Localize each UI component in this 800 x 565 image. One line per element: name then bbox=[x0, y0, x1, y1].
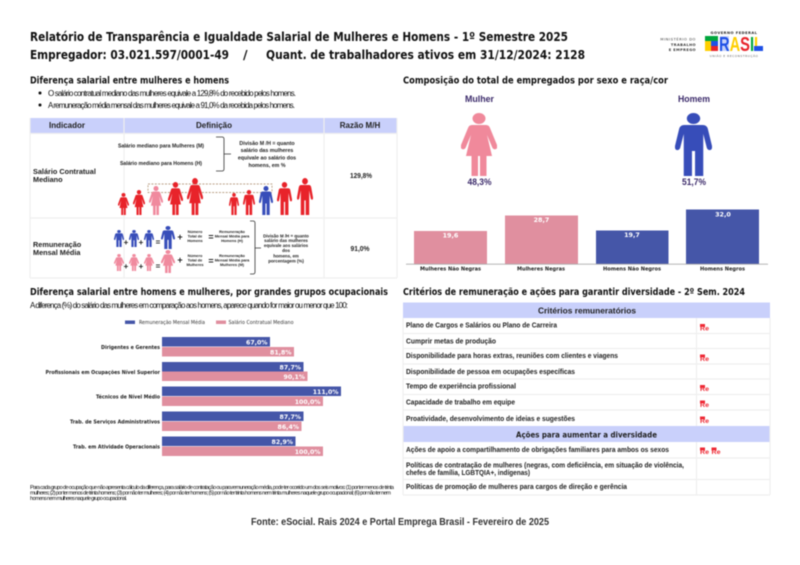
table: indicadores bbox=[30, 118, 397, 278]
section header: critérios remuneratórios: Critérios remuneratórios bbox=[538, 306, 636, 316]
formula labels: Mulheres bbox=[186, 262, 204, 267]
operators: = bbox=[208, 232, 214, 242]
bar chart: sexo e raça/cor bbox=[406, 210, 768, 272]
row: salário contratual mediano: homens, em % bbox=[248, 163, 286, 169]
bar chart: grupos ocupacionais: Profissionais em Ocupações Nível Superior bbox=[46, 369, 160, 376]
bar chart: grupos ocupacionais: 82,9% bbox=[272, 439, 293, 446]
operators: = bbox=[156, 238, 161, 247]
row: remuneração mensal média: Mensal Média bbox=[33, 248, 81, 257]
criteria rows: Plano de Cargos e Salários ou Plano de Carreira bbox=[406, 322, 557, 330]
bar chart: grupos ocupacionais: 86,4% bbox=[278, 424, 299, 431]
operators: = bbox=[208, 256, 214, 266]
section header: ações para aumentar a diversidade: Ações para aumentar a diversidade bbox=[516, 430, 657, 440]
footnote: homens nem mulheres naquele grupo ocupacional. bbox=[30, 496, 127, 502]
icons: marcadores vermelhos: Re bbox=[700, 449, 709, 456]
row: salário contratual mediano: Divisão M /H = quanto bbox=[239, 141, 295, 147]
logo: Governo Federal Brasil: UNIÃO E RECONSTRUÇÃO bbox=[710, 53, 758, 58]
row: salário contratual mediano: 129,8% bbox=[350, 171, 372, 180]
operators: + bbox=[177, 255, 183, 265]
operators bbox=[124, 232, 214, 271]
criteria rows: Cumprir metas de produção bbox=[406, 338, 496, 346]
bar chart: sexo e raça/cor: Mulheres Negras bbox=[517, 266, 565, 272]
icons: soma de homens bbox=[114, 226, 175, 249]
value: 51,7%: 51,7% bbox=[682, 177, 706, 187]
formula labels: Remuneração bbox=[219, 253, 245, 258]
row: remuneração mensal média: equivale aos salários bbox=[264, 243, 309, 248]
heading: Composição do total de empregados por sexo e raça/cor bbox=[403, 76, 668, 86]
row: remuneração mensal média: homens, em bbox=[273, 254, 299, 258]
label: mulher: Mulher bbox=[465, 94, 494, 104]
operators: + bbox=[124, 238, 129, 247]
table header: Indicador bbox=[49, 121, 85, 130]
bar chart: grupos ocupacionais: 100,0% bbox=[295, 449, 320, 456]
criteria rows: Capacidade de trabalho em equipe bbox=[406, 400, 515, 406]
table header bbox=[49, 121, 380, 130]
criteria rows: Proatividade, desenvolvimento de ideias e sugestões bbox=[406, 416, 575, 423]
logo: Ministério do Trabalho e Emprego: MINISTÉRIO DO bbox=[660, 36, 696, 42]
icon: homem bbox=[675, 113, 712, 176]
operators: + bbox=[177, 232, 183, 242]
bar chart: sexo e raça/cor: 19,6 bbox=[443, 232, 459, 240]
criteria rows: Tempo de experiência profissional bbox=[406, 384, 516, 390]
bar chart: grupos ocupacionais: 111,0% bbox=[313, 389, 338, 396]
logo: Governo Federal Brasil bbox=[705, 31, 763, 58]
row: salário contratual mediano: Salário mediano para Mulheres (M) bbox=[118, 144, 204, 150]
row: salário contratual mediano: salário das mulheres bbox=[241, 148, 293, 154]
bar chart: sexo e raça/cor: Homens Não Negros bbox=[603, 266, 661, 272]
icons: marcadores vermelhos bbox=[700, 324, 721, 456]
bar chart: grupos ocupacionais: Dirigentes e Gerentes bbox=[101, 345, 160, 351]
table header: Definição bbox=[196, 121, 232, 130]
footnote bbox=[30, 485, 395, 502]
bar chart: grupos ocupacionais: 87,7% bbox=[280, 364, 301, 372]
logo: Governo Federal Brasil: RASIL bbox=[719, 34, 763, 56]
bar chart: grupos ocupacionais: Trab. de Serviços Administrativos bbox=[70, 420, 160, 426]
legend: Salário Contratual Mediano bbox=[228, 319, 294, 326]
bar chart: grupos ocupacionais: 81,8% bbox=[270, 350, 292, 356]
row: remuneração mensal média: porcentagem (%) bbox=[268, 258, 304, 264]
bar chart: grupos ocupacionais bbox=[46, 337, 341, 456]
row: remuneração mensal média: salário das mulheres bbox=[264, 238, 308, 243]
label: homem: Homem bbox=[678, 94, 710, 104]
row: remuneração mensal média: 91,0% bbox=[350, 244, 370, 253]
formula labels: Número bbox=[188, 253, 203, 258]
logo: Ministério do Trabalho e Emprego bbox=[660, 36, 696, 52]
heading: Critérios de remuneração e ações para garantir diversidade - 2º Sem. 2024 bbox=[403, 287, 745, 298]
panel: composição do total de empregados bbox=[403, 76, 768, 272]
bullet text block: A remuneração média mensal das mulheres equivale a 91,0% da recebida pelos homens. bbox=[48, 101, 295, 110]
subtitle: A diferença (%) do salário das mulheres em comparação aos homens, aparece quando for maior ou menor que 100: bbox=[30, 301, 348, 310]
footnote: Para cada grupo de ocupação que não apresenta cálculo da diferença, para salário de contratação ou para remuneração média, pode ter ocorrido um dos seis motivos: (1) por ter menos de trinta bbox=[30, 485, 395, 491]
action rows: Políticas de promoção de mulheres para cargos de direção e gerência bbox=[406, 484, 627, 491]
bar chart: sexo e raça/cor: Mulheres Não Negras bbox=[420, 266, 481, 272]
row: remuneração mensal média: Divisão M /H = quanto bbox=[263, 234, 309, 238]
icons: pessoas ordenadas por salário bbox=[118, 178, 313, 215]
criteria rows: Disponibilidade de pessoa em ocupações específicas bbox=[406, 369, 575, 376]
operators: + bbox=[139, 238, 144, 247]
logo: Ministério do Trabalho e Emprego: E EMPREGO bbox=[669, 48, 696, 52]
source note: Fonte: eSocial. Rais 2024 e Portal Emprega Brasil - Fevereiro de 2025 bbox=[251, 517, 549, 528]
icons: marcadores vermelhos: Re bbox=[700, 402, 709, 409]
formula labels: Homens (H) bbox=[221, 238, 244, 243]
row: salário contratual mediano: Mediano bbox=[33, 175, 63, 184]
icons: soma de mulheres bbox=[114, 250, 175, 273]
bar chart: sexo e raça/cor: 32,0 bbox=[715, 210, 731, 218]
bar chart: grupos ocupacionais: 100,0% bbox=[295, 399, 320, 406]
bar chart: grupos ocupacionais: Técnicos de Nível Médio bbox=[96, 394, 160, 400]
operators: = bbox=[156, 262, 161, 271]
icons: marcadores vermelhos: Re bbox=[700, 356, 709, 363]
bar chart: grupos ocupacionais: 67,0% bbox=[246, 340, 268, 346]
title bbox=[30, 29, 585, 62]
logo: Governo Federal Brasil: GOVERNO FEDERAL bbox=[711, 31, 758, 35]
icons: marcadores vermelhos: Re bbox=[700, 386, 709, 393]
table: critérios bbox=[403, 302, 770, 495]
criteria rows bbox=[406, 322, 618, 423]
row: remuneração mensal média bbox=[33, 221, 370, 274]
action rows bbox=[406, 447, 684, 491]
formula labels: Mensal Média para bbox=[215, 258, 250, 262]
bullet text block bbox=[38, 89, 296, 110]
formula labels: Homens bbox=[187, 238, 203, 243]
panel: critérios de remuneração e ações bbox=[403, 287, 770, 495]
table header: Razão M/H bbox=[340, 121, 380, 130]
bar chart: grupos ocupacionais: 90,1% bbox=[284, 374, 305, 381]
formula labels: Total de bbox=[188, 234, 203, 238]
icon: mulher bbox=[461, 113, 497, 176]
operators: + bbox=[124, 262, 129, 271]
row: salário contratual mediano: Salário mediano para Homens (H) bbox=[120, 161, 202, 167]
panel: diferença salarial por grandes grupos ocupacionais bbox=[30, 287, 395, 502]
bar chart: grupos ocupacionais: 87,7% bbox=[280, 414, 301, 421]
icons: marcadores vermelhos: Re bbox=[712, 449, 721, 456]
bar chart: sexo e raça/cor: Homens Negros bbox=[700, 266, 745, 272]
legend: Remuneração Mensal Média bbox=[139, 319, 205, 326]
heading: Diferença salarial entre homens e mulheres, por grandes grupos ocupacionais bbox=[30, 287, 388, 298]
panel: diferença salarial entre mulheres e homens bbox=[30, 76, 397, 278]
formula labels: Mulheres (M) bbox=[220, 262, 245, 267]
logo: Ministério do Trabalho e Emprego: TRABALHO bbox=[671, 43, 696, 47]
legend bbox=[125, 319, 294, 326]
title: Relatório de Transparência e Igualdade Salarial de Mulheres e Homens - 1º Semestre 2025 bbox=[30, 29, 568, 44]
action rows: Políticas de contratação de mulheres (negras, com deficiência, em situação de violência, bbox=[406, 462, 684, 470]
action rows: Ações de apoio a compartilhamento de obrigações familiares para ambos os sexos bbox=[406, 447, 669, 454]
operators: + bbox=[139, 262, 144, 271]
row: remuneração mensal média: Remuneração bbox=[33, 240, 82, 249]
footnote: mulheres; (2) por ter menos de trinta homens; (3) por não ter mulheres; (4) por não ter homens; (5) por não ter trinta homens nem trinta mulheres naquele grupo ocupacional; (6) por não ter nem bbox=[30, 490, 391, 496]
formula labels: Número bbox=[188, 229, 203, 234]
formula labels bbox=[186, 229, 250, 267]
row: remuneração mensal média: dos bbox=[282, 248, 290, 253]
formula labels: Mensal Média para bbox=[215, 234, 250, 238]
title: Empregador: 03.021.597/0001-49 bbox=[30, 47, 229, 62]
value: 48,3%: 48,3% bbox=[468, 177, 492, 187]
bullet text block: O salário contratual mediano das mulheres equivale a 129,8% do recebido pelos homens. bbox=[48, 89, 296, 98]
bar chart: sexo e raça/cor: 28,7 bbox=[534, 216, 549, 224]
title: / bbox=[243, 47, 248, 62]
row: salário contratual mediano bbox=[33, 137, 372, 215]
icons: marcadores vermelhos: Re bbox=[700, 418, 709, 425]
action rows: chefes de família, LGBTQIA+, indígenas) bbox=[406, 470, 530, 477]
formula labels: Remuneração bbox=[219, 229, 245, 234]
row: salário contratual mediano: equivale ao salário dos bbox=[238, 156, 296, 162]
bar chart: sexo e raça/cor: 19,7 bbox=[624, 231, 640, 239]
title: Quant. de trabalhadores ativos em 31/12/2024: 2128 bbox=[266, 47, 585, 62]
formula labels: Total de bbox=[188, 258, 203, 262]
bar chart: grupos ocupacionais: Trab. em Atividade Operacionais bbox=[73, 444, 160, 450]
criteria rows: Disponibilidade para horas extras, reuniões com clientes e viagens bbox=[406, 353, 618, 360]
heading: Diferença salarial entre mulheres e homens bbox=[30, 76, 229, 86]
icons: marcadores vermelhos: Re bbox=[700, 326, 709, 332]
row: salário contratual mediano: Salário Contratual bbox=[33, 167, 96, 176]
